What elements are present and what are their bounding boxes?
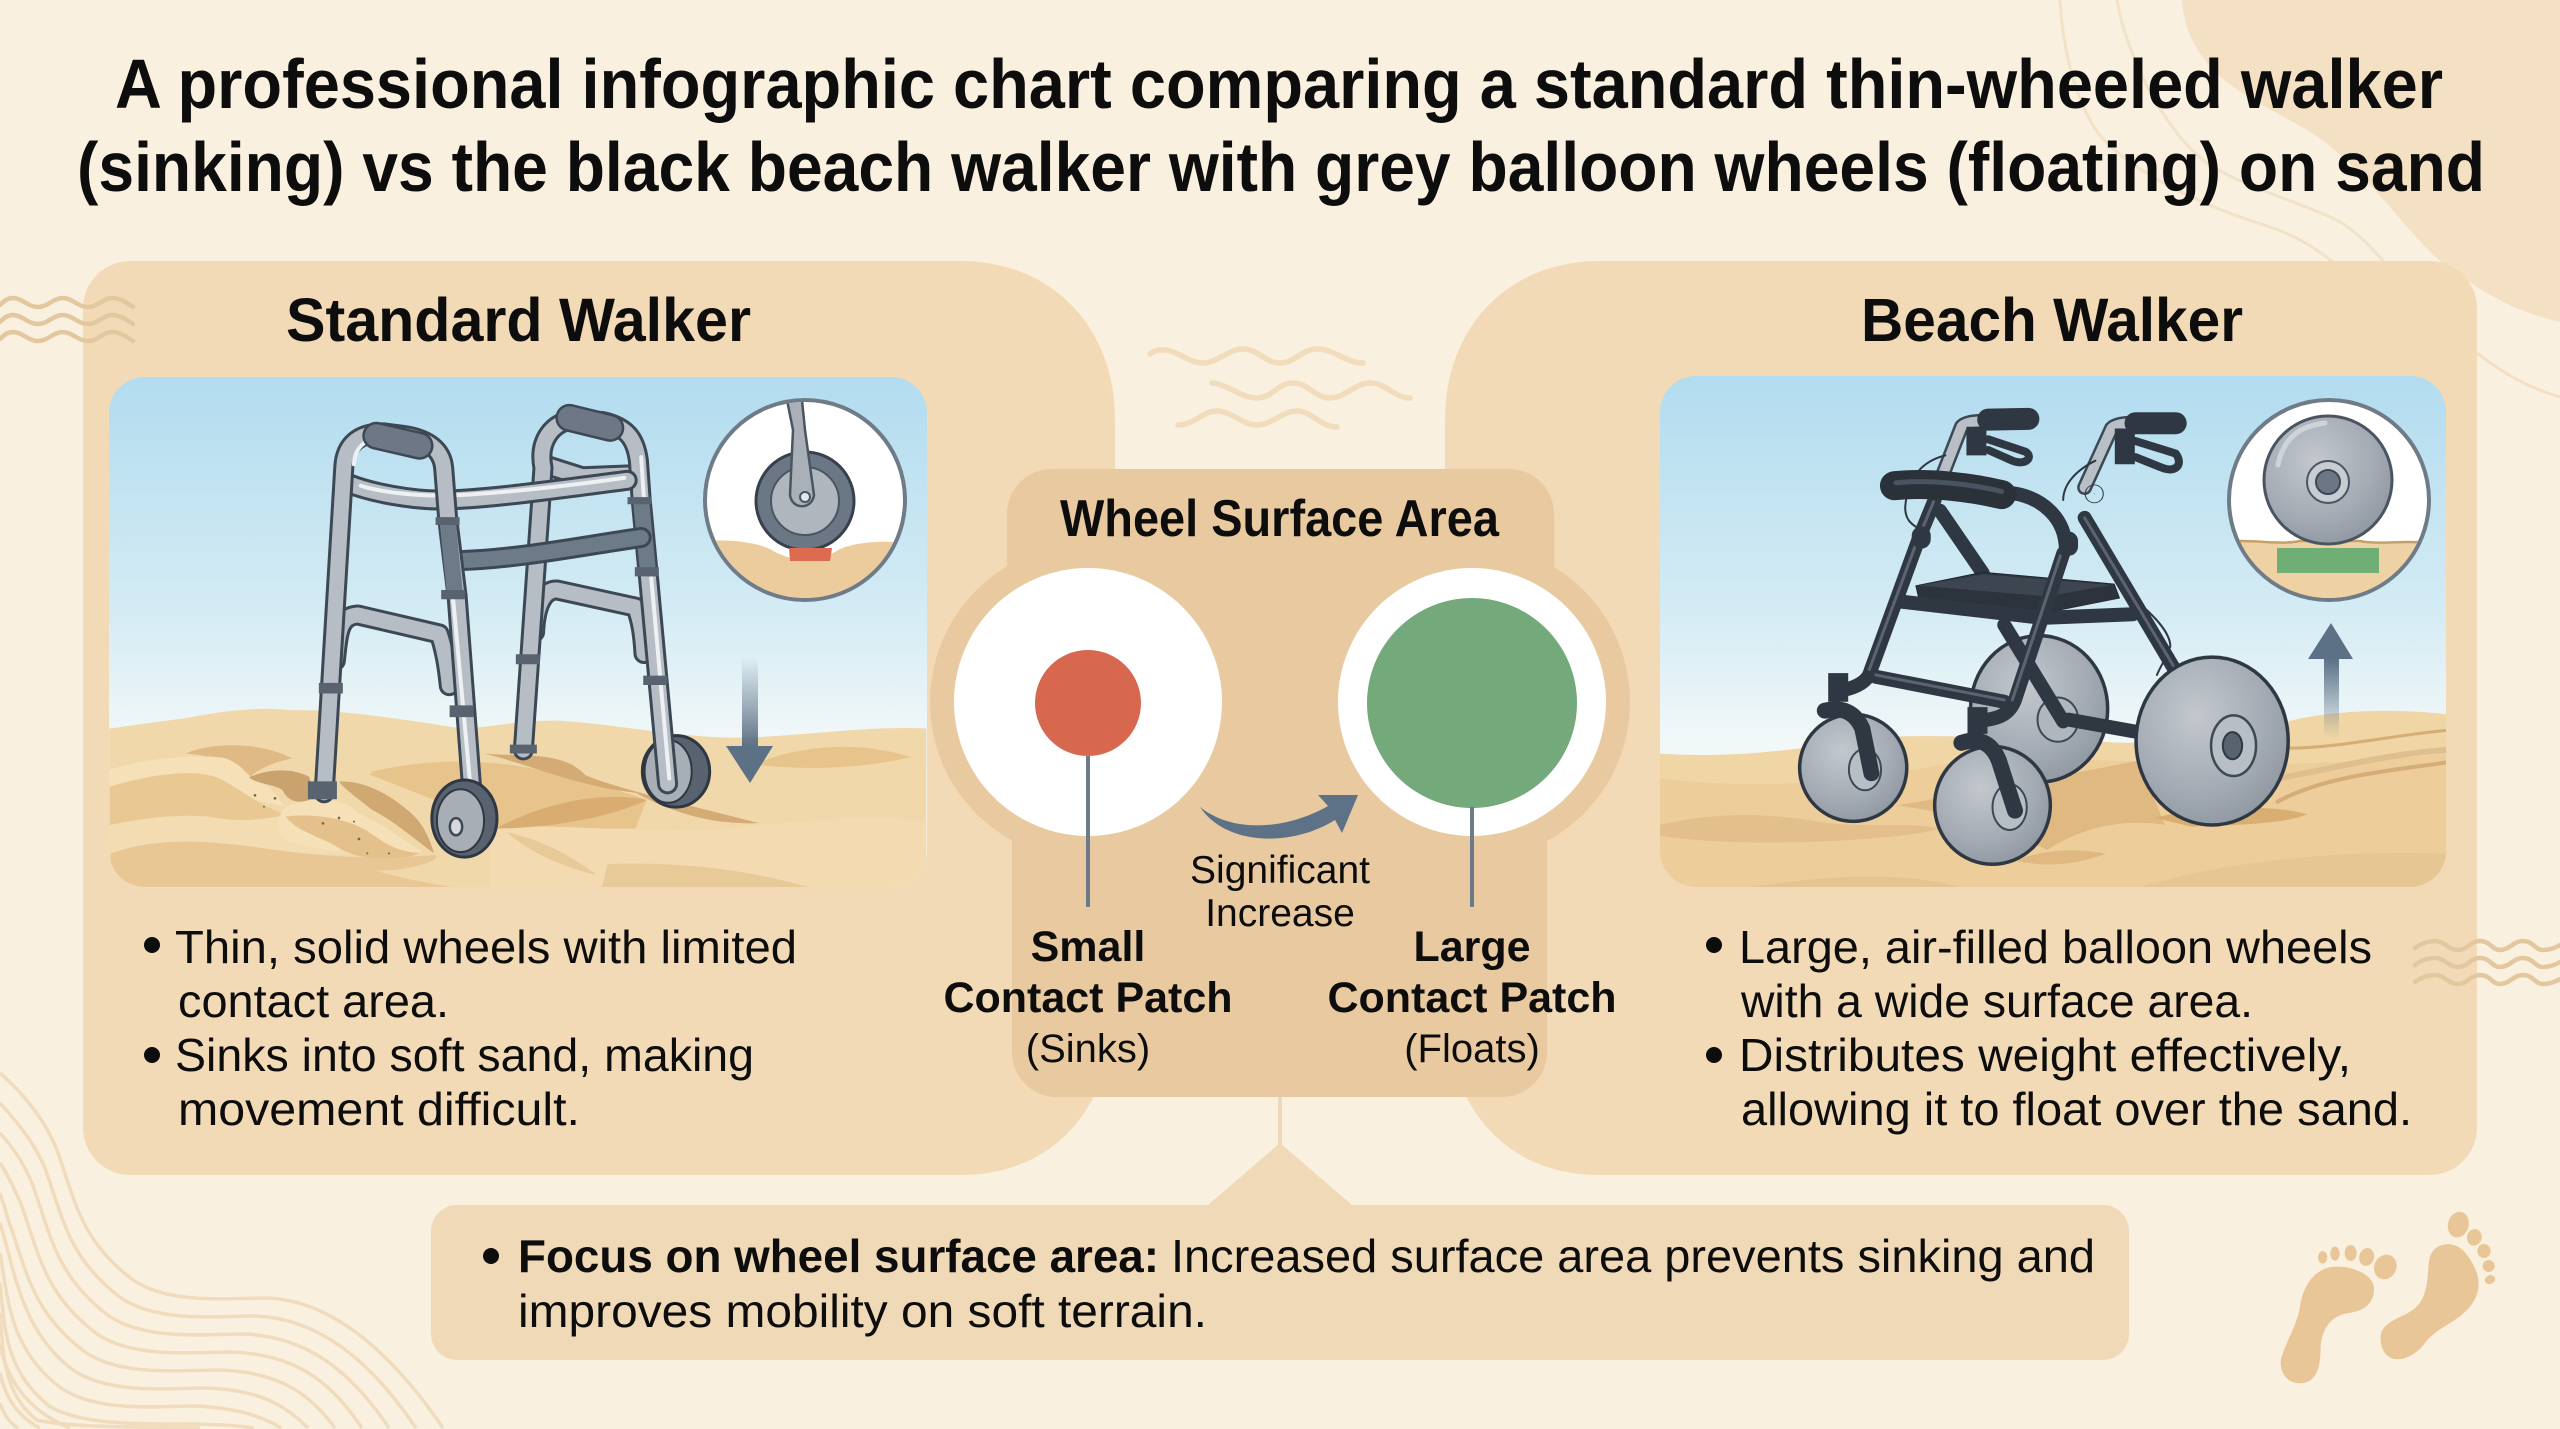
halo: large patch [1314, 544, 1630, 860]
label: large contact patch: Contact Patch [1327, 974, 1617, 1022]
bullets: standard walker [144, 921, 797, 1135]
summary box: improves mobility on soft terrain. [518, 1285, 1207, 1337]
icon: footprints [2281, 1209, 2496, 1383]
label: small contact patch: (Sinks) [1026, 1027, 1150, 1071]
background lines: top right contours [2060, 0, 2560, 397]
label: significant increase: Increase [1205, 892, 1355, 935]
walker frame [322, 418, 710, 857]
heading: wheel surface area: Wheel Surface Area [1060, 490, 1500, 548]
title [77, 45, 2485, 206]
arrow: significant increase [1200, 795, 1358, 839]
panel: standard walker background [83, 261, 1115, 1175]
illustration: standard walker sinking in sand [109, 377, 927, 890]
label: small contact patch [943, 923, 1233, 1071]
icon: sink arrow down [726, 657, 773, 783]
background blob: top right [2182, 0, 2560, 322]
large contact patch circle [1338, 568, 1606, 907]
bullets: beach walker: with a wide surface area. [1740, 975, 2253, 1027]
decorative waves: left [0, 298, 133, 341]
decorative waves: centre [1150, 349, 1410, 427]
heading: standard walker: Standard Walker [286, 286, 751, 354]
sand dunes [109, 709, 926, 890]
bullets: beach walker [1706, 921, 2412, 1135]
label: large contact patch: Large [1413, 923, 1531, 971]
rollator frame and balloon wheels [1800, 419, 2288, 864]
title: A professional infographic chart comparing a standard thin-wheeled walker [115, 45, 2443, 123]
panel: wheel surface area [930, 469, 1630, 1097]
small contact patch circle [954, 568, 1222, 907]
bullets: beach walker: Distributes weight effectively, [1739, 1029, 2351, 1081]
background contour lines: bottom left [0, 1073, 443, 1428]
summary box: Focus on wheel surface area: [518, 1230, 1159, 1282]
bullets: beach walker: Large, air-filled balloon wheels [1739, 921, 2372, 973]
label: large contact patch [1327, 923, 1617, 1071]
label: significant increase [1190, 849, 1370, 935]
halo: small patch [930, 544, 1246, 860]
bullets: standard walker: movement difficult. [178, 1083, 580, 1135]
label: small contact patch: Contact Patch [943, 974, 1233, 1022]
decorative waves: right [2415, 941, 2560, 984]
label: large contact patch: (Floats) [1404, 1027, 1540, 1071]
inset: thin wheel contact [700, 400, 910, 610]
bullets: standard walker: Sinks into soft sand, making [175, 1029, 754, 1081]
sand dunes [1660, 711, 2446, 887]
summary box [431, 1205, 2129, 1360]
bullets: beach walker: allowing it to float over the sand. [1741, 1083, 2412, 1135]
icon: float arrow up [2308, 623, 2353, 738]
illustration: beach walker floating on sand [1660, 376, 2446, 887]
summary box: Increased surface area prevents sinking and [1171, 1230, 2095, 1282]
panel: beach walker background [1445, 261, 2477, 1175]
label: significant increase: Significant [1190, 849, 1370, 892]
label: small contact patch: Small [1031, 923, 1145, 971]
inset: balloon wheel contact [2225, 400, 2435, 610]
bullets: standard walker: Thin, solid wheels with limited [175, 921, 797, 973]
heading: beach walker: Beach Walker [1861, 286, 2243, 354]
connector to summary [1208, 1097, 1352, 1205]
bullets: standard walker: contact area. [178, 975, 449, 1027]
